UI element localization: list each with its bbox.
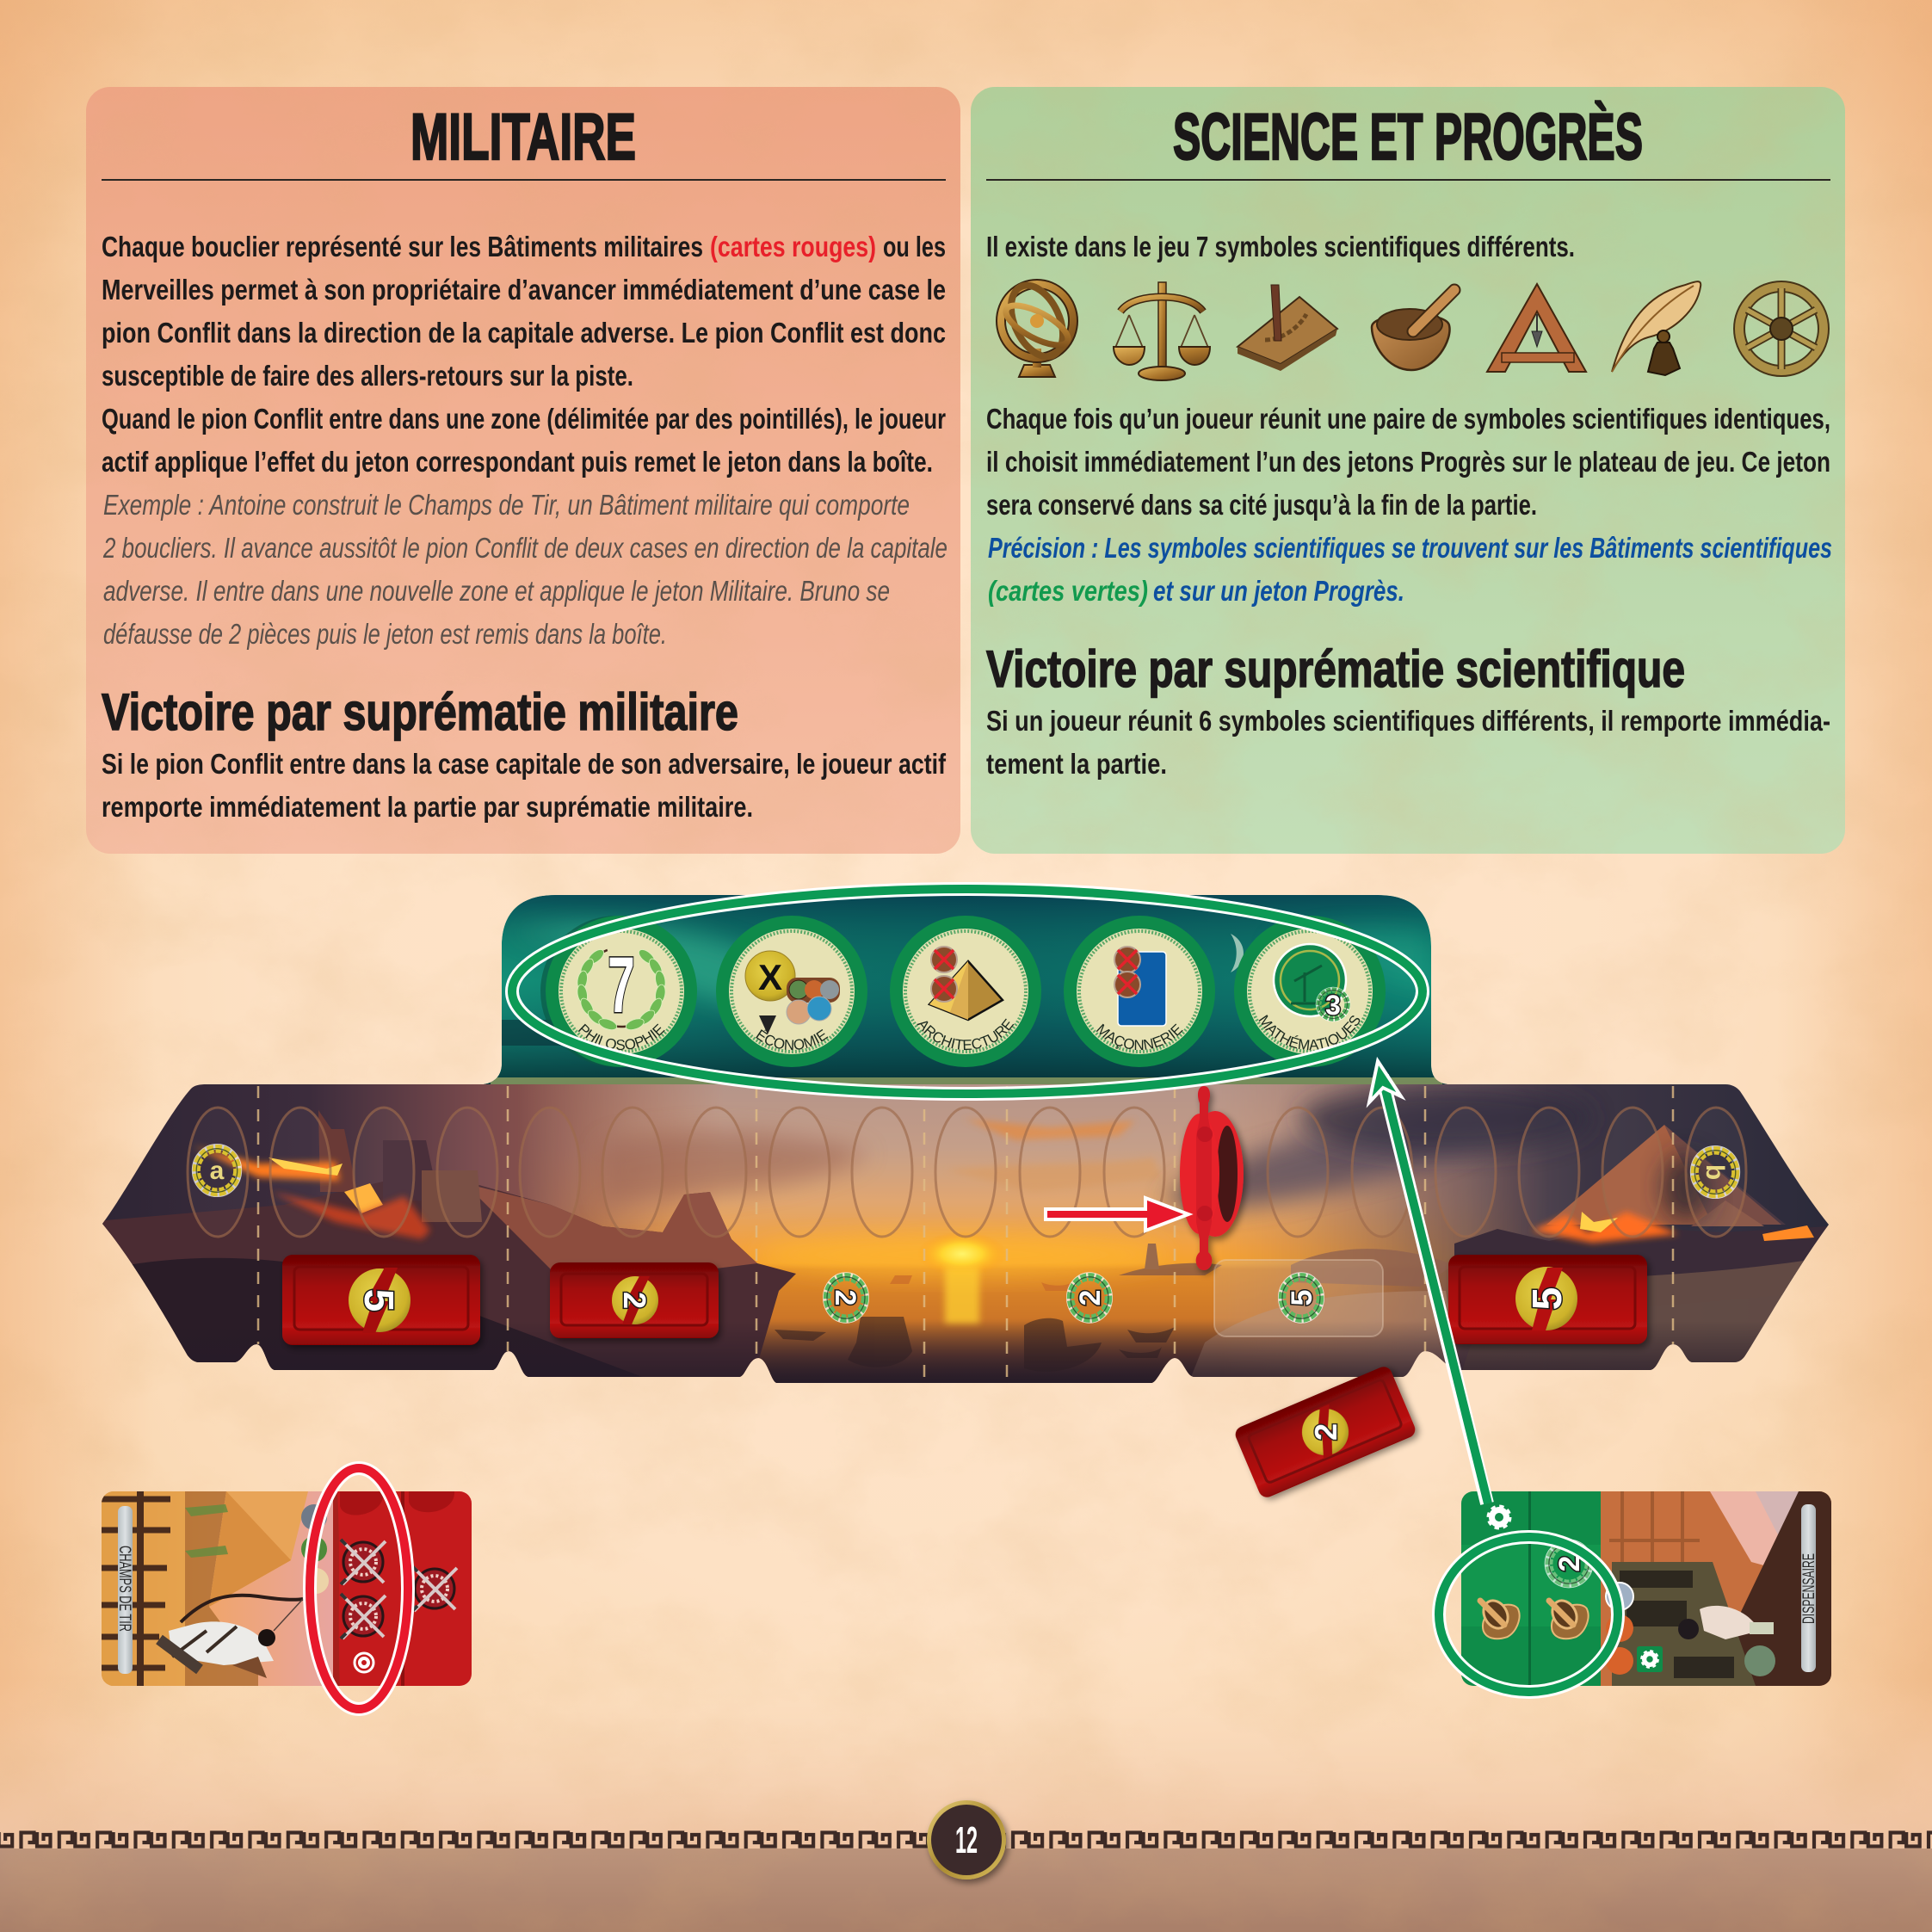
progress token: architecture bbox=[890, 916, 1041, 1067]
left cliffs bbox=[102, 1182, 796, 1377]
text block: militaire rules: Quand le pion Conflit entre dans une zone (délimitée par des pointillés), le joueur bbox=[102, 403, 946, 435]
laurel: science 2 on card bbox=[1547, 1542, 1590, 1585]
text block: militaire rules: susceptible de faire des allers-retours sur la piste. bbox=[102, 360, 633, 392]
laurel: science 2 on card: 2 bbox=[1553, 1556, 1586, 1571]
card label: DISPENSAIRE bbox=[1800, 1553, 1818, 1624]
token: military 2 left bbox=[550, 1262, 719, 1338]
progress token: économie bbox=[716, 916, 867, 1067]
text block: victoire militaire: Si le pion Conflit entre dans la case capitale de son adversaire, le joueur actif bbox=[102, 748, 947, 780]
text block: précision: et sur un jeton Progrès. bbox=[1153, 575, 1404, 607]
laurel: science 2 bbox=[825, 1275, 867, 1320]
lighthouse bbox=[1145, 1244, 1159, 1269]
progress token: architecture: ARCHITECTURE bbox=[917, 1019, 1014, 1050]
text block: militaire example: 2 boucliers. Il avance aussitôt le pion Conflit de deux cases en direction de la capitale bbox=[102, 532, 947, 564]
text block: militaire rules: ou les bbox=[883, 231, 946, 262]
right city and pyramid bbox=[1546, 1125, 1781, 1225]
text block: militaire rules: pion Conflit dans la direction de la capitale adverse. Le pion Conflit est donc bbox=[102, 317, 946, 349]
board: conflict track and progress tokens bbox=[102, 882, 1829, 1383]
fire left bbox=[194, 1146, 340, 1181]
icon: shield bbox=[412, 1566, 457, 1611]
laurel: science 2: 2 bbox=[1074, 1290, 1107, 1305]
card: champs de tir bbox=[102, 1468, 472, 1709]
text block: paire de symboles: sera conservé dans sa cité jusqu’à la fin de la partie. bbox=[986, 489, 1537, 521]
laurel: science 2 bbox=[1069, 1275, 1110, 1320]
heading: militaire: MILITAIRE bbox=[410, 101, 636, 174]
progress token: économie: ÉCONOMIE bbox=[756, 1029, 828, 1050]
text block: précision: (cartes vertes) bbox=[988, 575, 1148, 607]
heading: science et progrès: SCIENCE ET PROGRÈS bbox=[1173, 101, 1643, 174]
icon: wheel bbox=[1739, 287, 1824, 371]
icon: builder's square bbox=[1487, 284, 1586, 372]
progress token: mathématiques: MATHÉMATIQUES bbox=[1258, 1015, 1360, 1050]
green upper board bbox=[482, 895, 1447, 1084]
icon: armillary sphere bbox=[1001, 277, 1073, 377]
token: military 5 right bbox=[1448, 1255, 1647, 1344]
laurel: science 5: 5 bbox=[1286, 1290, 1318, 1305]
icon: conflict pawn bbox=[1180, 1086, 1244, 1270]
board artwork bbox=[86, 895, 1846, 1394]
panel: militaire text bbox=[102, 101, 947, 823]
callout ellipse: progress tokens bbox=[512, 889, 1423, 1094]
icon: gear tile bbox=[1637, 1646, 1663, 1672]
text block: intro symboles: Il existe dans le jeu 7 symboles scientifiques différents. bbox=[986, 231, 1575, 262]
card artwork bbox=[1461, 1491, 1831, 1686]
ghost slot bbox=[1214, 1260, 1383, 1336]
text block: militaire example: adverse. Il entre dans une nouvelle zone et applique le jeton Militaire. Bruno se bbox=[103, 575, 890, 607]
icon: shield bbox=[341, 1594, 386, 1639]
text block: victoire militaire: remporte immédiatement la partie par suprématie militaire. bbox=[102, 791, 753, 823]
text block: militaire example: défausse de 2 pièces puis le jeton est remis dans la boîte. bbox=[103, 618, 667, 650]
page number badge: 12 bbox=[955, 1819, 978, 1861]
text block: militaire rules bbox=[102, 231, 946, 478]
heading: victoire scientifique: Victoire par suprématie scientifique bbox=[986, 640, 1685, 698]
capital marker b: b bbox=[1701, 1164, 1729, 1180]
icon: quill and ink bbox=[1612, 281, 1701, 375]
token: military 5 left bbox=[282, 1255, 480, 1345]
progress token: maçonnerie: MAÇONNERIE bbox=[1096, 1024, 1183, 1050]
capital marker a: a bbox=[210, 1157, 225, 1185]
text block: victoire scientifique bbox=[986, 705, 1830, 780]
card: dispensaire bbox=[1439, 1491, 1831, 1692]
icon: sundial bbox=[1238, 285, 1337, 371]
text block: victoire scientifique: tement la partie. bbox=[986, 748, 1167, 780]
panel: militaire background bbox=[86, 87, 960, 854]
token: detached military 2: 2 bbox=[1308, 1423, 1343, 1441]
text block: paire de symboles bbox=[986, 403, 1830, 521]
token: military 2 left: 2 bbox=[617, 1292, 652, 1309]
progress token: mathématiques: 3 bbox=[1325, 990, 1341, 1021]
icon: mortar symbol bbox=[1478, 1596, 1525, 1644]
science symbols row bbox=[1001, 277, 1824, 380]
sun bbox=[756, 1234, 1169, 1275]
icon: scales bbox=[1114, 282, 1210, 380]
icon: gear top bbox=[1489, 1507, 1509, 1528]
callout ellipse: mortar pair bbox=[1439, 1537, 1618, 1692]
footer greek key border bbox=[0, 1830, 1932, 1849]
token: detached military 2 bbox=[1233, 1364, 1417, 1500]
card label: CHAMPS DE TIR bbox=[115, 1546, 133, 1632]
text block: précision bbox=[988, 532, 1832, 607]
text block: militaire rules: actif applique l’effet du jeton correspondant puis remet le jeton dans la boîte. bbox=[102, 446, 933, 478]
icon: mortar and pestle bbox=[1372, 290, 1454, 370]
progress token: mathématiques bbox=[1234, 916, 1386, 1067]
icon: shield bbox=[341, 1540, 386, 1584]
sunset sky and sea bbox=[516, 1080, 1549, 1390]
text block: militaire rules: Chaque bouclier représenté sur les Bâtiments militaires bbox=[102, 231, 703, 262]
arrow: green link from card to progress tokens bbox=[1369, 1061, 1488, 1503]
text block: victoire militaire bbox=[102, 748, 947, 823]
text block: militaire example: Exemple : Antoine construit le Champs de Tir, un Bâtiment militaire qui comporte bbox=[103, 489, 910, 521]
heading: victoire militaire: Victoire par suprématie militaire bbox=[102, 683, 738, 741]
text block: militaire rules: (cartes rouges) bbox=[710, 231, 876, 262]
icon: mortar symbol bbox=[1546, 1596, 1594, 1644]
progress token: philosophie bbox=[540, 916, 697, 1067]
progress token: économie: X bbox=[758, 957, 782, 997]
icon: target bbox=[355, 1653, 373, 1672]
token: military 5 right: 5 bbox=[1525, 1287, 1571, 1310]
progress token: philosophie: PHILOSOPHIE bbox=[578, 1024, 665, 1050]
laurel: science 2: 2 bbox=[829, 1290, 861, 1305]
progress token: maçonnerie bbox=[1064, 916, 1215, 1067]
panel: science text bbox=[986, 101, 1832, 780]
track ovals bbox=[188, 1108, 1746, 1237]
capital marker a bbox=[194, 1146, 239, 1194]
laurel: science 5 bbox=[1281, 1275, 1322, 1320]
progress token: philosophie: 7 bbox=[608, 941, 635, 1029]
card label bbox=[1800, 1504, 1818, 1672]
capital marker b bbox=[1693, 1148, 1738, 1196]
card artwork bbox=[102, 1491, 472, 1686]
boats bbox=[775, 1317, 1174, 1365]
token: military 5 left: 5 bbox=[355, 1289, 401, 1312]
text block: militaire example bbox=[102, 489, 947, 650]
page number badge bbox=[927, 1800, 1006, 1880]
arrow: red pawn movement bbox=[1046, 1198, 1188, 1231]
callout ellipse: shields bbox=[310, 1468, 408, 1709]
text block: militaire rules: Merveilles permet à son propriétaire d’avancer immédiatement d’une case le bbox=[102, 274, 946, 306]
panel: science background bbox=[971, 87, 1845, 854]
temples bbox=[318, 1110, 357, 1192]
